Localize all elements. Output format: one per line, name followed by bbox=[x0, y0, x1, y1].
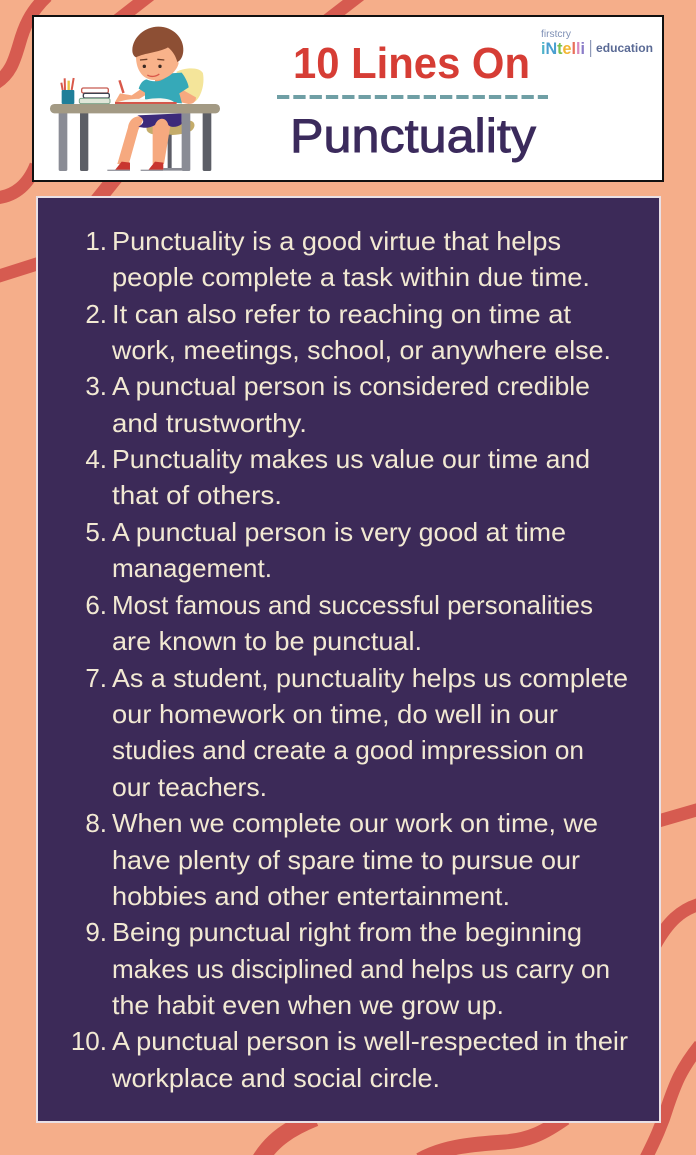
line 2: work, meetings, school, or anywhere else. bbox=[111, 335, 611, 365]
line 3: 3. bbox=[85, 371, 107, 401]
line 8: hobbies and other entertainment. bbox=[112, 881, 510, 911]
line 6: Most famous and successful personalities bbox=[112, 590, 593, 620]
hair bbox=[132, 27, 183, 62]
open book on desk bbox=[118, 98, 174, 102]
logo: firstcry intelli education: education bbox=[596, 41, 653, 55]
line 10: A punctual person is well-respected in their bbox=[112, 1026, 628, 1056]
line 8: When we complete our work on time, we bbox=[112, 808, 598, 838]
neck bbox=[155, 73, 169, 83]
logo: firstcry intelli education: iNtelli bbox=[541, 39, 585, 58]
line 4 bbox=[85, 444, 590, 510]
line 7: studies and create a good impression on bbox=[112, 735, 584, 765]
stacked books bbox=[82, 88, 108, 93]
line 10: workplace and social circle. bbox=[111, 1063, 440, 1093]
shoe soles bbox=[107, 168, 163, 172]
line 3: A punctual person is considered credible bbox=[112, 371, 590, 401]
line 1: Punctuality is a good virtue that helps bbox=[112, 226, 561, 256]
right arm bbox=[168, 87, 196, 104]
logo: firstcry intelli education bbox=[541, 29, 653, 58]
legs bbox=[117, 116, 145, 165]
line 5: management. bbox=[112, 553, 272, 583]
line 6: 6. bbox=[85, 590, 107, 620]
pencil bbox=[118, 80, 125, 93]
desk legs bbox=[59, 112, 67, 171]
line 5: 5. bbox=[85, 517, 107, 547]
dashed divider bbox=[277, 95, 548, 99]
line 7: our teachers. bbox=[112, 772, 267, 802]
line 6 bbox=[85, 590, 593, 656]
left arm bbox=[115, 87, 147, 102]
panel: ten lines list bbox=[37, 197, 660, 1122]
line 9: the habit even when we grow up. bbox=[112, 990, 504, 1020]
desk top bbox=[50, 104, 220, 113]
shirt bbox=[139, 73, 189, 103]
logo: firstcry intelli education: firstcry bbox=[541, 29, 571, 40]
title: Punctuality: Punctuality bbox=[290, 109, 537, 162]
line 2: It can also refer to reaching on time at bbox=[112, 299, 572, 329]
line 1: people complete a task within due time. bbox=[112, 262, 590, 292]
line 8: have plenty of spare time to pursue our bbox=[112, 845, 580, 875]
line 9: makes us disciplined and helps us carry on bbox=[112, 954, 610, 984]
line 9 bbox=[85, 917, 610, 1020]
line 4: 4. bbox=[85, 444, 107, 474]
line 3: and trustworthy. bbox=[112, 408, 307, 438]
line 9: 9. bbox=[85, 917, 107, 947]
chair back bbox=[177, 68, 203, 102]
line 7: 7. bbox=[85, 663, 107, 693]
shorts bbox=[137, 113, 182, 128]
line 7: As a student, punctuality helps us complete bbox=[112, 663, 628, 693]
line 2: 2. bbox=[85, 299, 107, 329]
line 5: A punctual person is very good at time bbox=[112, 517, 566, 547]
line 4: Punctuality makes us value our time and bbox=[112, 444, 590, 474]
line 1: 1. bbox=[85, 226, 107, 256]
line 9: Being punctual right from the beginning bbox=[112, 917, 582, 947]
head bbox=[136, 45, 179, 80]
line 4: that of others. bbox=[112, 480, 282, 510]
header panel bbox=[33, 16, 663, 181]
line 10 bbox=[71, 1026, 628, 1093]
line 3 bbox=[85, 371, 590, 438]
line 1 bbox=[85, 226, 590, 292]
title: 10 Lines On: 10 Lines On bbox=[293, 39, 530, 88]
pencil cup bbox=[62, 90, 74, 104]
eyes and smile bbox=[143, 65, 146, 68]
line 10: 10. bbox=[71, 1026, 107, 1056]
pencils bbox=[61, 78, 74, 90]
line 5 bbox=[85, 517, 566, 583]
chair seat and stand bbox=[146, 121, 194, 135]
line 7: our homework on time, do well in our bbox=[112, 699, 558, 729]
line 8: 8. bbox=[85, 808, 107, 838]
line 6: are known to be punctual. bbox=[112, 626, 422, 656]
line 8 bbox=[85, 808, 598, 911]
illustration: boy studying at desk bbox=[50, 27, 220, 171]
shoes bbox=[115, 162, 130, 170]
line 2 bbox=[85, 299, 611, 365]
line 7 bbox=[85, 663, 628, 802]
